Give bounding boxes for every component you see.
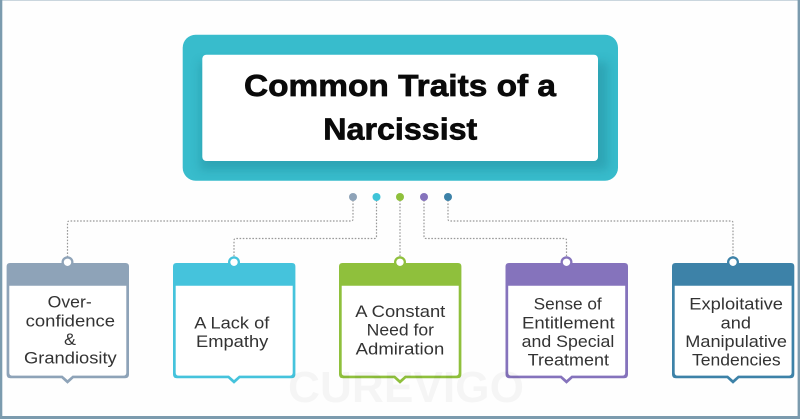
card text: Treatment <box>528 351 609 370</box>
card text: Grandiosity <box>24 349 117 368</box>
card text: Entitlement <box>522 313 615 332</box>
connector: need for admiration <box>396 193 404 258</box>
title panel <box>183 35 618 181</box>
card text: Need for <box>367 321 434 340</box>
card text: confidence <box>26 311 115 330</box>
title heading: Narcissist <box>323 111 477 146</box>
card text: and <box>721 313 751 332</box>
card text: and Special <box>522 332 614 351</box>
panel: a lack of empathy <box>173 256 295 384</box>
card text <box>522 295 615 370</box>
card text: Over- <box>48 293 92 312</box>
panel: sense of entitlement and special treatment <box>506 256 628 384</box>
panel: a constant need for admiration <box>339 256 461 384</box>
card text <box>685 295 787 370</box>
card text: Exploitative <box>689 295 783 314</box>
panel: over-confidence and grandiosity <box>7 256 129 384</box>
card text: Sense of <box>534 295 602 314</box>
watermark: CUREVIGO <box>288 363 524 412</box>
card text: A Lack of <box>194 313 270 332</box>
card text: & <box>64 330 77 349</box>
card text: Manipulative <box>685 332 787 351</box>
card text: Tendencies <box>692 351 781 370</box>
card text <box>24 293 117 368</box>
title heading <box>244 68 557 146</box>
card text <box>355 302 446 358</box>
connector: lack of empathy <box>234 193 380 258</box>
card text: Empathy <box>196 332 269 351</box>
card text <box>194 313 270 351</box>
title heading: Common Traits of a <box>244 68 557 103</box>
connector: over-confidence <box>68 193 357 258</box>
connector: exploitative <box>444 193 733 258</box>
card text: A Constant <box>355 302 446 321</box>
connector: entitlement <box>420 193 566 258</box>
card text: Admiration <box>356 339 444 358</box>
panel: exploitative and manipulative tendencies <box>672 256 794 384</box>
